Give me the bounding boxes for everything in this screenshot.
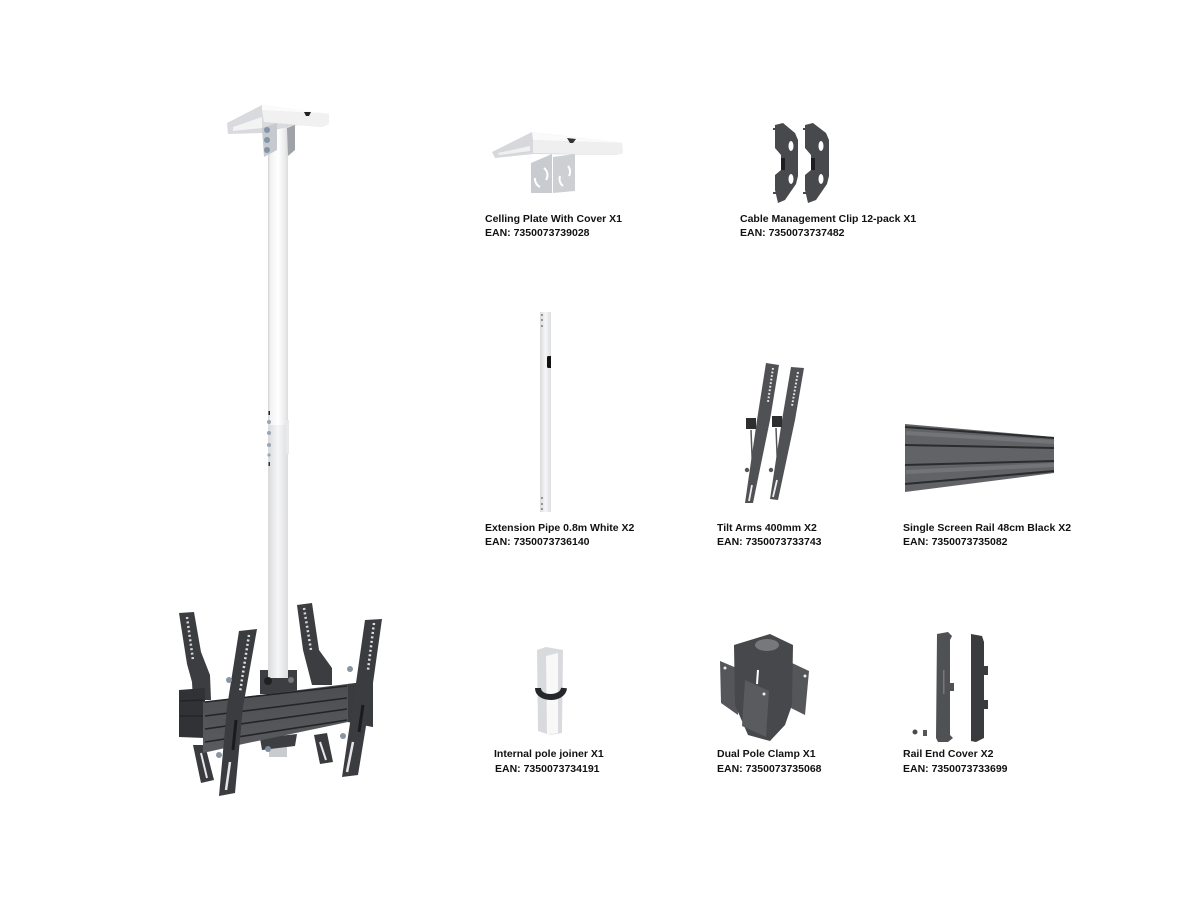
back tilt arms bbox=[179, 603, 333, 783]
item: tilt arms bbox=[717, 363, 822, 548]
label: pole joiner: Internal pole joiner X1 bbox=[494, 748, 604, 760]
icon: tilt arms bbox=[745, 363, 804, 503]
front tilt arms bbox=[216, 619, 382, 796]
label: ceiling plate: Celling Plate With Cover X1 bbox=[485, 213, 622, 225]
item: dual pole clamp: EAN: 7350073735068 bbox=[717, 763, 822, 775]
screen rails bbox=[179, 681, 373, 753]
item: internal pole joiner bbox=[494, 647, 604, 775]
label: rail end cover: Rail End Cover X2 bbox=[903, 748, 994, 760]
icon: cable clips bbox=[773, 123, 829, 203]
label: cable clip: Cable Management Clip 12-pack X1 bbox=[740, 213, 916, 225]
item: ceiling plate: EAN: 7350073739028 bbox=[485, 227, 590, 239]
label: extension pipe: Extension Pipe 0.8m White X2 bbox=[485, 522, 635, 534]
item: ceiling plate bbox=[485, 132, 623, 239]
item: rail end cover: EAN: 7350073733699 bbox=[903, 763, 1008, 775]
icon: dual pole clamp bbox=[720, 634, 809, 741]
item: screen rail: EAN: 7350073735082 bbox=[903, 536, 1008, 548]
item: cable management clip bbox=[740, 123, 916, 239]
ceiling plate bbox=[227, 105, 329, 157]
label: pole clamp: Dual Pole Clamp X1 bbox=[717, 748, 816, 760]
item: extension pipe bbox=[485, 312, 635, 548]
icon: extension pipe bbox=[540, 312, 551, 512]
label: tilt arms: Tilt Arms 400mm X2 bbox=[717, 522, 817, 534]
dual pole clamp on pole bbox=[260, 660, 297, 757]
item: dual pole clamp bbox=[717, 634, 822, 775]
icon: internal pole joiner bbox=[537, 647, 564, 735]
item: screen rail bbox=[903, 424, 1071, 548]
icon: ceiling plate bbox=[492, 132, 623, 193]
assembled ceiling mount bbox=[179, 105, 382, 796]
item: tilt arms: EAN: 7350073733743 bbox=[717, 536, 822, 548]
icon: single screen rail bbox=[905, 424, 1054, 492]
main white pole bbox=[267, 125, 289, 675]
item: rail end cover bbox=[903, 632, 1008, 775]
item: extension pipe: EAN: 7350073736140 bbox=[485, 536, 590, 548]
icon: rail end covers bbox=[912, 632, 988, 742]
item: internal pole joiner: EAN: 7350073734191 bbox=[495, 763, 600, 775]
item: cable management clip: EAN: 7350073737482 bbox=[740, 227, 845, 239]
label: screen rail: Single Screen Rail 48cm Black X2 bbox=[903, 522, 1071, 534]
